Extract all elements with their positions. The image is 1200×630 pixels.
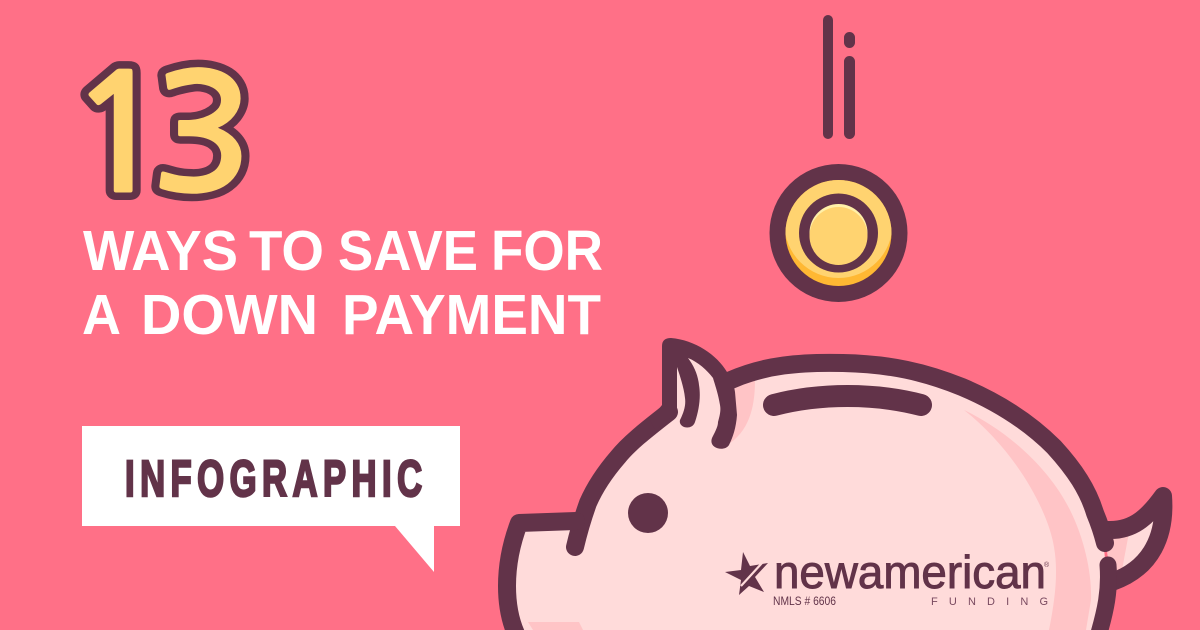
piggy bank <box>507 338 1163 630</box>
pig tail <box>1105 496 1163 582</box>
number 13: 1 <box>66 56 173 217</box>
NMLS number: NMLS # 6606 <box>773 596 836 608</box>
heading: ways to save for a down payment: WAYS <box>83 219 238 283</box>
pig outline <box>507 363 1109 630</box>
motion lines above coin <box>823 15 855 139</box>
heading: ways to save for a down payment: FOR <box>491 219 603 283</box>
icon: falling coin <box>770 164 908 302</box>
pig ear <box>650 338 737 449</box>
logo wordmark: newamerican <box>774 546 1046 598</box>
heading: ways to save for a down payment: DOWN <box>141 283 318 347</box>
speech bubble: infographic <box>82 426 460 572</box>
logo star <box>725 552 768 595</box>
pig eye <box>628 493 668 533</box>
funding: FUNDING <box>931 596 1048 608</box>
number 13: 3 <box>149 56 256 217</box>
heading: ways to save for a down payment: PAYMENT <box>342 283 601 347</box>
logo: new american funding <box>725 546 1050 608</box>
speech bubble: infographic: INFOGRAPHIC <box>125 452 428 508</box>
body shading <box>528 380 1091 630</box>
heading: ways to save for a down payment: SAVE <box>338 219 478 283</box>
heading: ways to save for a down payment <box>82 219 603 347</box>
heading: ways to save for a down payment: A <box>82 283 121 347</box>
heading: ways to save for a down payment: TO <box>249 219 324 283</box>
pig body fill <box>508 345 1106 630</box>
coin slot <box>774 396 921 405</box>
registered mark: ® <box>1044 561 1050 569</box>
